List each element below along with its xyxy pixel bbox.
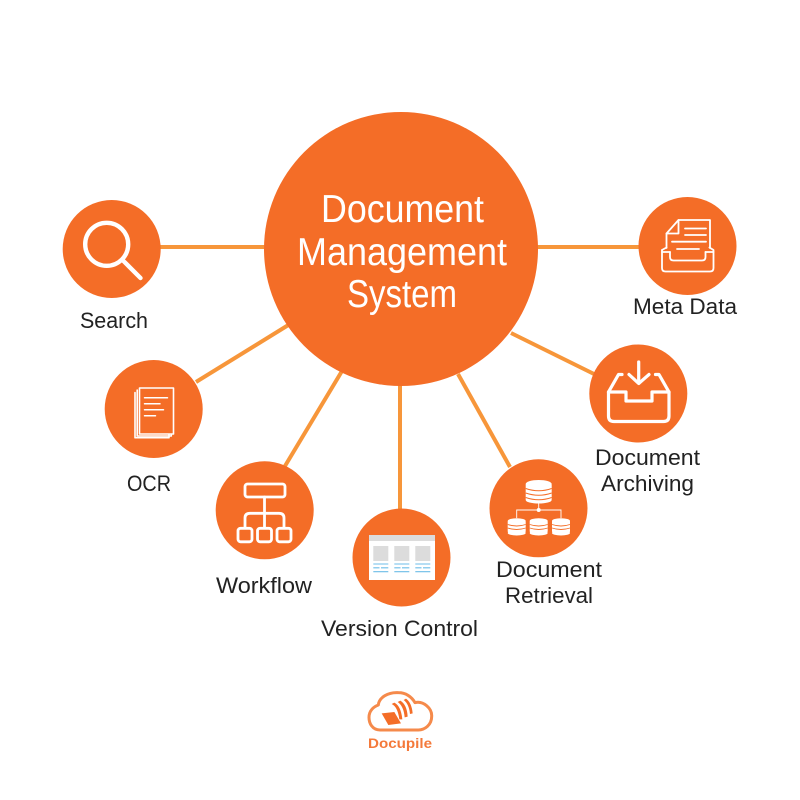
connectors from hub to feature nodes: [158, 247, 642, 512]
logo: Docupile: [368, 693, 432, 751]
label: Document Archiving: Archiving: [601, 471, 694, 496]
icon: version table window: [369, 535, 435, 580]
icon: flow chart: [238, 484, 291, 542]
title: hub heading: Management: [297, 231, 507, 274]
title: hub heading: Document: [321, 188, 484, 231]
icon: document in tray: [662, 220, 714, 272]
connector: Meta Data: [535, 245, 642, 249]
icon: inbox tray with down arrow: [608, 362, 669, 422]
node: Meta Data: [633, 197, 738, 319]
icon: stacked documents: [135, 388, 174, 438]
connector: OCR: [196, 324, 290, 382]
node: Version Control: [321, 508, 478, 641]
title: hub heading: System: [347, 273, 457, 316]
label: Document Retrieval: Retrieval: [505, 583, 593, 608]
connector: Workflow: [285, 371, 342, 466]
node: OCR: [105, 360, 203, 496]
label: Version Control: Version Control: [321, 616, 478, 641]
connector: Version Control: [398, 380, 402, 512]
icon: database hierarchy: [508, 480, 570, 536]
icon: magnifying glass: [85, 223, 140, 278]
label: Search: Search: [80, 308, 148, 333]
hub: Document Management System: [264, 112, 538, 386]
label: Meta Data: Meta Data: [633, 294, 738, 319]
icon: cloud with book pages: [369, 693, 432, 730]
label: Document Archiving: Document: [595, 445, 700, 470]
label: Workflow: Workflow: [216, 573, 312, 598]
wordmark: Docupile: Docupile: [368, 735, 432, 751]
connector: Document Archiving: [511, 333, 594, 374]
label: Document Retrieval: Document: [496, 557, 602, 582]
connector: Document Retrieval: [458, 374, 510, 467]
node: Workflow: [216, 461, 314, 598]
node: Search: [63, 200, 161, 333]
node: Document Archiving: [589, 344, 700, 496]
label: OCR: OCR: [127, 471, 171, 496]
node: Document Retrieval: [490, 459, 602, 608]
connector: Search: [158, 245, 270, 249]
